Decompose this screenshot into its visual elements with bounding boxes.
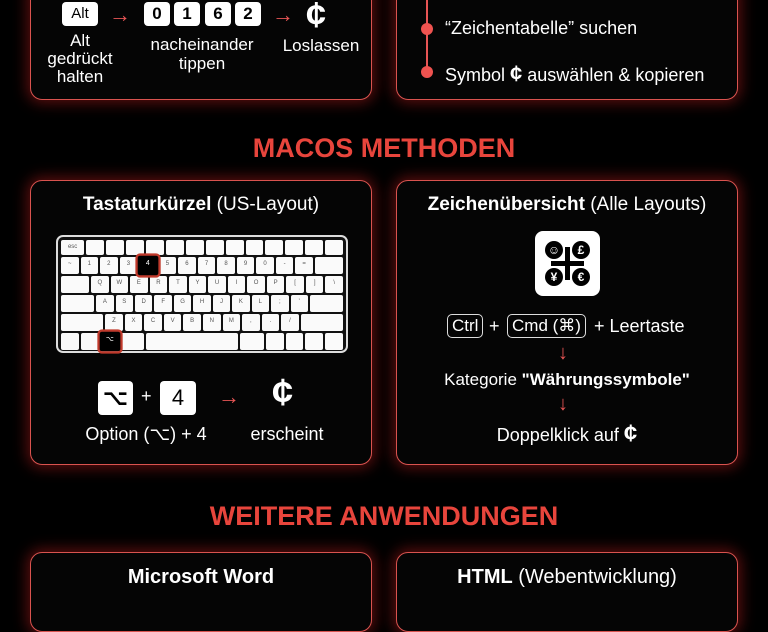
keys: 0162: 2 <box>243 4 253 23</box>
keyboard: ] <box>314 280 316 286</box>
keyboard: 6 <box>185 261 189 267</box>
arrow: → <box>218 384 240 409</box>
key: option <box>98 381 133 415</box>
keyboard: M <box>229 318 234 324</box>
arrow down: ↓ <box>558 393 568 415</box>
keyboard: , <box>250 318 252 324</box>
keyboard: 5 <box>166 261 169 267</box>
step: Symbol kopieren: Symbol ¢ auswählen & kopieren <box>445 61 704 86</box>
keyboard: N <box>210 318 214 324</box>
keyboard: L <box>259 299 262 305</box>
keyboard: C <box>151 318 155 324</box>
keyboard: F <box>161 299 165 305</box>
keyboard: K <box>239 299 243 305</box>
keyboard: - <box>284 261 286 267</box>
keyboard: U <box>215 280 219 286</box>
keyboard: P <box>274 280 278 286</box>
shortcut: Ctrl Cmd Leertaste: + Leertaste <box>594 316 685 336</box>
keys: 0162: 6 <box>213 4 223 23</box>
text: Kategorie: Kategorie "Währungssymbole" <box>444 370 690 389</box>
keyboard: D <box>142 299 146 305</box>
label: nacheinander tippen <box>150 35 254 73</box>
keyboard: ; <box>279 299 281 305</box>
keyboard: T <box>176 280 180 286</box>
icon: character viewer: ¥ <box>551 270 557 284</box>
key: 4 <box>160 381 196 415</box>
key: option: ⌥ <box>103 385 128 410</box>
keyboard: A <box>103 299 107 305</box>
keyboard: Z <box>112 318 116 324</box>
keyboard: V <box>171 318 175 324</box>
keyboard: 3 <box>127 261 130 267</box>
icon: character viewer: € <box>578 270 584 284</box>
icon: character viewer: £ <box>578 243 584 257</box>
keyboard: 8 <box>224 261 228 267</box>
keyboard: . <box>270 318 271 324</box>
keyboard: 2 <box>107 261 110 267</box>
keyboard: 9 <box>244 261 247 267</box>
keyboard: ⌥ <box>106 336 114 343</box>
key: 4: 4 <box>172 385 184 410</box>
label: Alt gedrückt halten: gedrückt <box>47 49 113 68</box>
label: Option + 4: Option (⌥) + 4 <box>85 424 207 444</box>
arrow down: ↓ <box>558 342 568 364</box>
label: nacheinander tippen: tippen <box>179 54 225 73</box>
keyboard: X <box>131 318 136 324</box>
plus: + <box>141 386 152 406</box>
step: Zeichentabelle: “Zeichentabelle” suchen <box>445 18 637 38</box>
label: Alt gedrückt halten <box>47 31 113 86</box>
keyboard: R <box>156 280 161 286</box>
keyboard <box>56 235 348 353</box>
cent result: ¢ <box>272 372 293 414</box>
keyboard: E <box>137 280 141 286</box>
keyboard: I <box>236 280 237 286</box>
keyboard: 4 <box>146 260 150 267</box>
keyboard: B <box>190 318 194 324</box>
keys: 0162 <box>144 2 261 26</box>
icon: character viewer: ☺ <box>548 243 560 257</box>
key: Alt: Alt <box>71 5 89 22</box>
keyboard: ' <box>299 299 300 305</box>
keyboard: Y <box>195 280 199 286</box>
title: HTML (Webentwicklung) <box>457 566 677 588</box>
arrow: → <box>272 2 294 27</box>
keyboard: 7 <box>205 261 208 267</box>
keyboard: 0 <box>263 261 267 267</box>
shortcut: Ctrl Cmd Leertaste: Ctrl <box>452 316 478 335</box>
keyboard: [ <box>294 280 296 286</box>
label: Alt gedrückt halten: Alt <box>70 31 90 50</box>
label: Loslassen: Loslassen <box>283 36 359 55</box>
text: Doppelklick: Doppelklick auf ¢ <box>497 420 637 447</box>
key: Alt <box>62 2 98 26</box>
label: erscheint: erscheint <box>250 424 324 444</box>
title: Zeichenübersicht (Alle Layouts) <box>428 194 706 215</box>
keyboard: O <box>254 280 258 286</box>
panel: Tastaturkürzel <box>30 180 372 465</box>
label: nacheinander tippen: nacheinander <box>150 35 254 54</box>
heading: WEITERE ANWENDUNGEN: WEITERE ANWENDUNGEN <box>210 501 558 531</box>
keyboard: 1 <box>88 261 91 267</box>
keyboard: ~ <box>68 261 72 267</box>
heading: MACOS METHODEN: MACOS METHODEN <box>253 133 515 163</box>
panel: windows alt code <box>30 0 372 100</box>
keyboard: J <box>220 299 223 305</box>
keyboard: Q <box>97 280 102 286</box>
title: Tastaturkürzel (US-Layout) <box>83 194 319 215</box>
keyboard: \ <box>333 280 335 286</box>
keyboard: esc <box>68 244 77 250</box>
keyboard: / <box>289 318 291 324</box>
label: Alt gedrückt halten: halten <box>57 67 103 86</box>
keyboard: W <box>117 280 122 286</box>
keyboard: H <box>200 299 204 305</box>
panel: HTML <box>396 552 738 632</box>
shortcut: Ctrl Cmd Leertaste <box>447 314 685 338</box>
shortcut: Ctrl Cmd Leertaste: + <box>489 316 500 336</box>
keys: 0162: 0 <box>152 4 162 23</box>
arrow: → <box>109 2 131 27</box>
icon: character viewer <box>535 231 600 296</box>
keyboard: = <box>302 261 306 267</box>
shortcut: Ctrl Cmd Leertaste: Cmd (⌘) <box>512 316 581 335</box>
panel: Zeichenübersicht <box>396 180 738 465</box>
title: Microsoft Word <box>128 566 274 588</box>
panel: Microsoft Word <box>30 552 372 632</box>
keys: 0162: 1 <box>182 4 192 23</box>
panel: windows charmap <box>396 0 738 100</box>
keyboard: G <box>180 299 185 305</box>
keyboard: S <box>122 299 126 305</box>
timeline line <box>426 0 428 74</box>
